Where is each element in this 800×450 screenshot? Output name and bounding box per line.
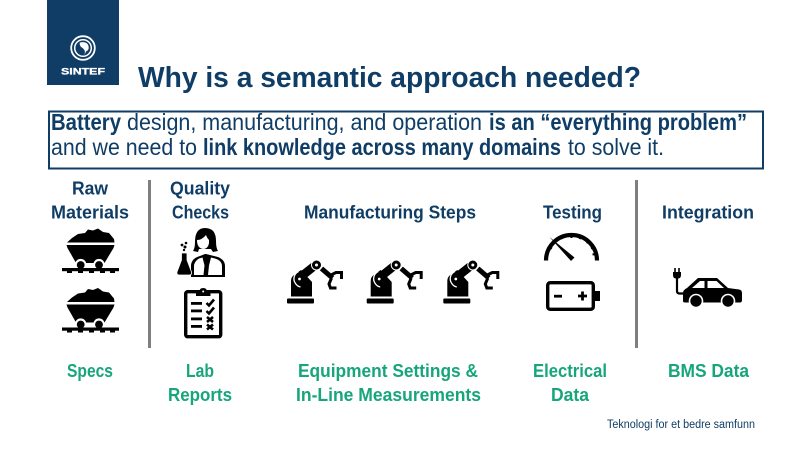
callout: everything problem: design, manufacturing, and operation <box>127 109 482 135</box>
label: Equipment Settings and In-Line Measurements: Equipment Settings & <box>298 361 478 381</box>
callout: everything problem: and we need to <box>51 134 197 160</box>
heading: Quality Checks: Checks <box>172 202 229 222</box>
footer tagline: Teknologi for et bedre samfunn <box>607 419 755 431</box>
heading: Raw Materials: Materials <box>51 202 129 222</box>
icon: robot arm 3 <box>443 260 498 304</box>
label: Lab Reports: Lab <box>186 361 214 381</box>
callout: everything problem: is an “everything problem” <box>489 109 747 135</box>
label: Equipment Settings and In-Line Measurements <box>296 361 481 405</box>
label: Specs: Specs <box>67 361 113 381</box>
callout: everything problem: Battery <box>51 109 121 135</box>
callout: everything problem: link knowledge across many domains <box>203 134 561 160</box>
icon: speedometer gauge <box>546 234 597 261</box>
label: Electrical Data: Electrical <box>533 361 607 381</box>
heading: Quality Checks: Quality <box>170 178 230 198</box>
icon: mine cart 1 <box>62 228 119 273</box>
heading: Manufacturing Steps: Manufacturing Steps <box>304 202 476 222</box>
heading: Quality Checks <box>170 178 230 222</box>
callout: everything problem: to solve it. <box>568 134 664 160</box>
label: Lab Reports <box>168 361 232 405</box>
label: Electrical Data <box>533 361 607 405</box>
icon: clipboard checklist <box>186 288 221 337</box>
logo: SINTEF: SINTEF <box>61 66 105 78</box>
icon: scientist with flask <box>177 228 225 277</box>
heading: Testing: Testing <box>543 202 602 222</box>
title: Why is a semantic approach needed? <box>138 62 641 94</box>
callout: everything problem <box>49 109 763 168</box>
icon: battery <box>548 283 600 309</box>
label: BMS Data: BMS Data <box>668 361 750 381</box>
icon: robot arm 1 <box>287 260 342 304</box>
icon: robot arm 2 <box>367 260 421 304</box>
heading: Integration: Integration <box>662 202 754 222</box>
heading: Raw Materials <box>51 178 129 222</box>
label: Lab Reports: Reports <box>168 385 232 405</box>
label: Electrical Data: Data <box>551 385 590 405</box>
icon: electric car <box>673 268 742 308</box>
icon: mine cart 2 <box>62 288 119 332</box>
label: Equipment Settings and In-Line Measurements: In-Line Measurements <box>296 385 481 405</box>
logo: SINTEF <box>47 0 119 85</box>
heading: Raw Materials: Raw <box>72 178 109 198</box>
